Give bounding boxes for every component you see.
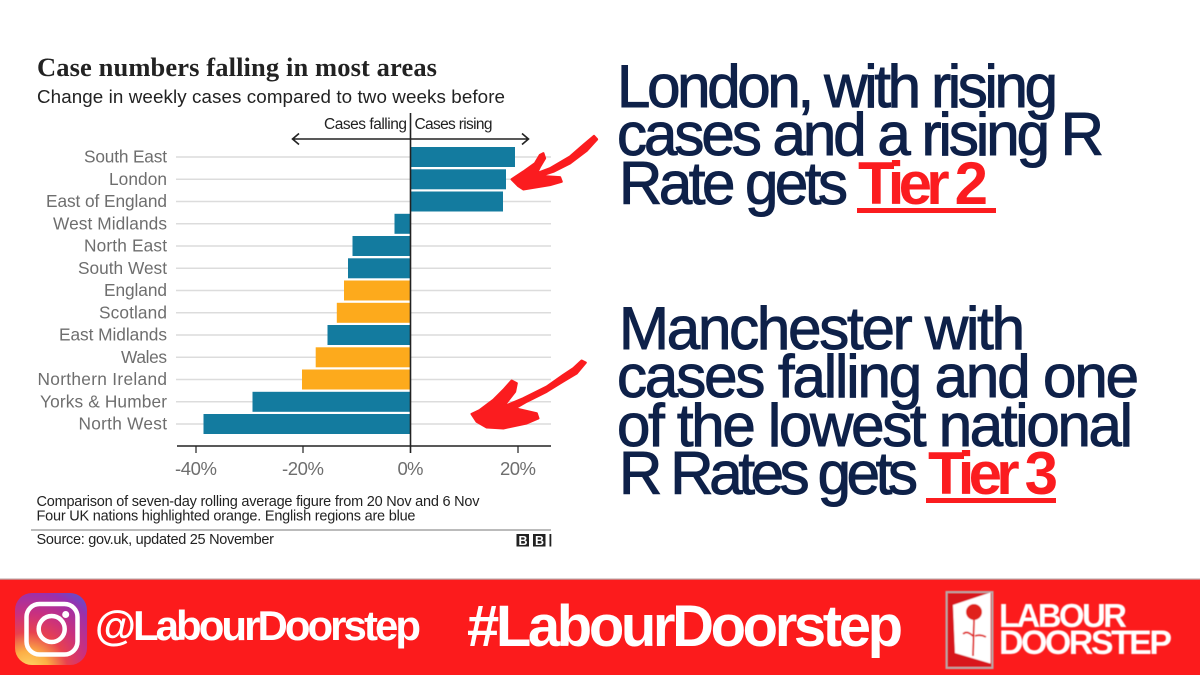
BBC logo	[516, 534, 551, 548]
bars	[204, 147, 515, 434]
category labels: East of England	[46, 191, 167, 211]
category labels: England	[104, 280, 167, 300]
category labels: South East	[84, 146, 167, 166]
category labels: South West	[78, 258, 167, 278]
category labels: East Midlands	[59, 324, 167, 344]
axis tick labels: 20%	[500, 458, 536, 479]
banner	[0, 578, 1200, 675]
Tier 2 highlight: Tier 2	[858, 150, 988, 217]
category labels: Northern Ireland	[38, 369, 167, 389]
footnote: Four UK nations highlighted orange. English regions are blue	[36, 508, 416, 524]
Tier 3 highlight: Tier 3	[928, 440, 1058, 507]
footnote	[36, 494, 480, 524]
heading: Manchester: R Rates gets	[619, 440, 918, 507]
category labels	[38, 146, 167, 434]
axes	[177, 113, 551, 453]
axis tick labels: 0%	[398, 458, 424, 479]
heading: Manchester: Manchester with	[619, 295, 1025, 362]
heading: London: Rate gets	[619, 150, 848, 217]
grid lines	[176, 157, 551, 424]
BBC logo: B	[518, 534, 528, 548]
direction labels and arrow: Cases falling	[324, 116, 407, 133]
logo: Labour Doorstep	[946, 592, 1172, 668]
logo: Labour Doorstep: LABOUR	[999, 597, 1127, 634]
chart title: Case numbers falling in most areas	[37, 52, 437, 82]
direction labels and arrow: Cases rising	[414, 116, 492, 133]
heading: London: cases and a rising R	[617, 101, 1104, 168]
category labels: West Midlands	[53, 214, 167, 234]
axis tick labels: -20%	[282, 458, 324, 479]
category labels: Scotland	[99, 302, 167, 322]
icon: door with rose	[946, 592, 992, 668]
footnote: Comparison of seven-day rolling average figure from 20 Nov and 6 Nov	[36, 494, 480, 510]
Instagram handle: @LabourDoorstep	[95, 602, 421, 649]
arrow: pointing at London	[512, 136, 597, 189]
icon: Instagram	[15, 593, 87, 665]
heading: Manchester	[617, 295, 1139, 507]
BBC logo: B	[535, 534, 544, 548]
category labels: North West	[78, 414, 167, 434]
heading: London: London, with rising	[617, 53, 1058, 120]
heading: Manchester: cases falling and one	[617, 343, 1139, 410]
category labels: Wales	[121, 347, 167, 367]
category labels: London	[109, 169, 167, 189]
axis tick labels	[175, 458, 536, 479]
axis tick labels: -40%	[175, 458, 217, 479]
category labels: North East	[84, 236, 167, 256]
chart subtitle: Change in weekly cases compared to two weeks before	[37, 86, 505, 107]
arrow: pointing at North West	[472, 361, 586, 428]
source line: Source: gov.uk, updated 25 November	[36, 532, 274, 548]
panel: BBC bar chart	[31, 52, 551, 548]
heading: Manchester: of the lowest national	[617, 392, 1133, 459]
category labels: Yorks & Humber	[40, 392, 167, 412]
heading: London	[617, 53, 1104, 217]
hashtag: #LabourDoorstep	[467, 594, 903, 659]
direction labels and arrow	[292, 116, 528, 144]
logo: Labour Doorstep: DOORSTEP	[999, 624, 1172, 662]
